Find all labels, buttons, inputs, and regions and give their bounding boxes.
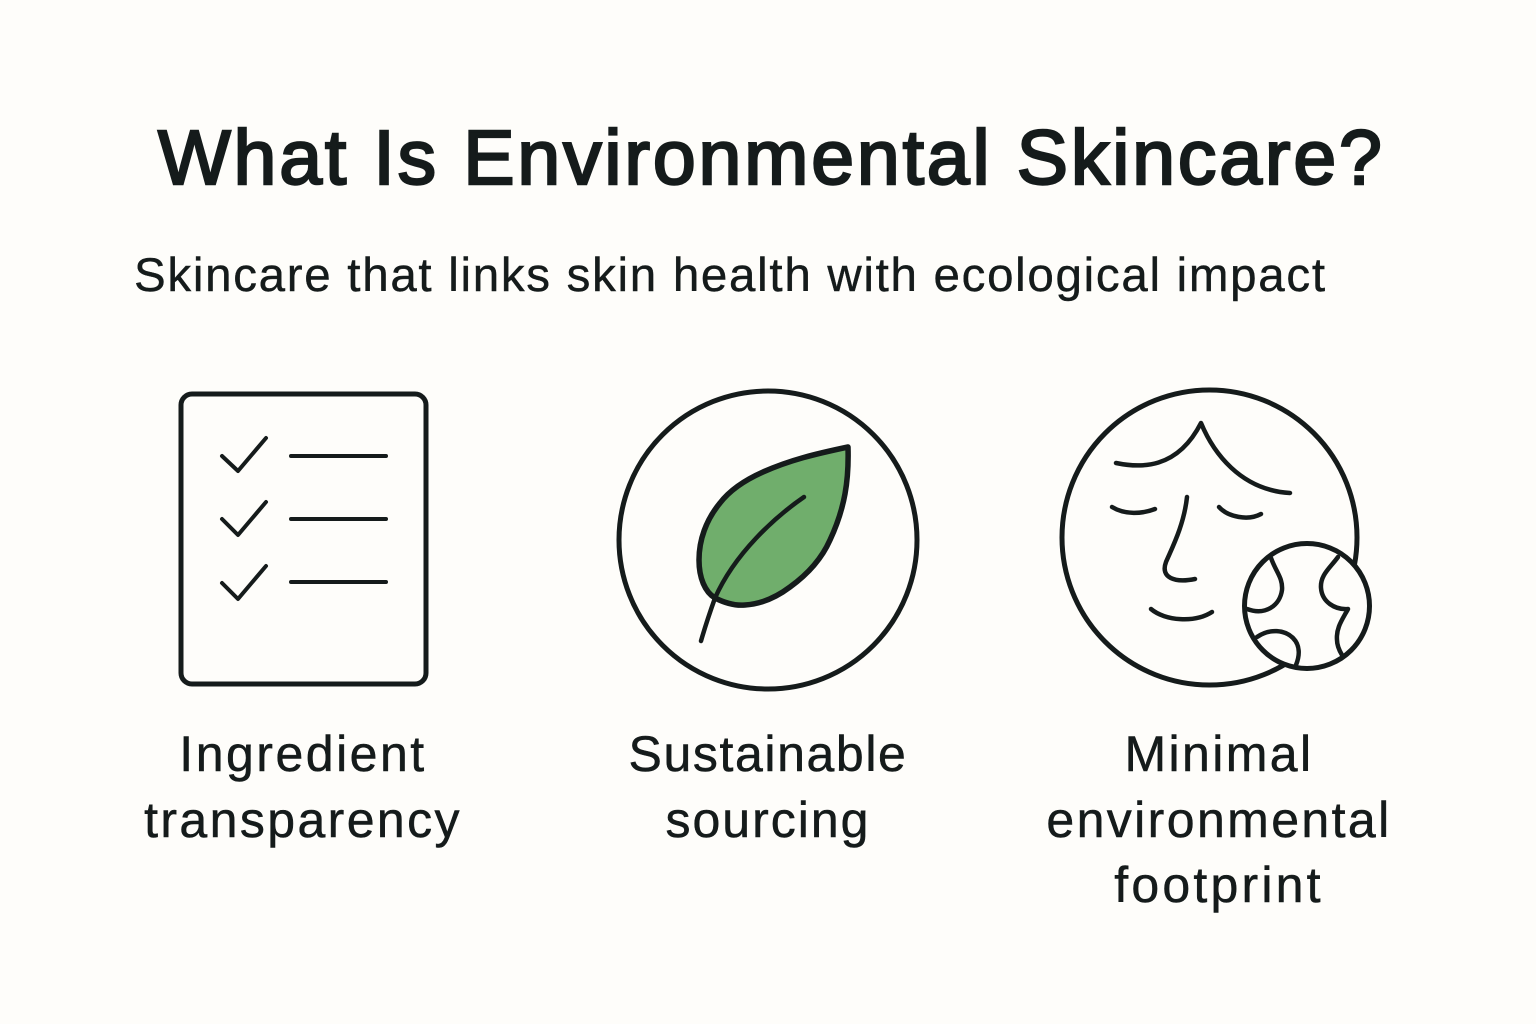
icon: leaf in circle	[619, 391, 917, 689]
label: ingredient transparency: Ingredient	[179, 726, 427, 782]
icon: checklist	[181, 394, 426, 684]
title: What Is Environmental Skincare?	[158, 115, 1385, 201]
subtitle: Skincare that links skin health with ecological impact	[134, 249, 1327, 302]
icon: face with globe	[1062, 390, 1370, 685]
label: ingredient transparency	[144, 726, 462, 848]
label: minimal environmental footprint: Minimal	[1124, 726, 1314, 782]
label: sustainable sourcing: Sustainable	[629, 726, 907, 782]
label: minimal environmental footprint: environmental	[1046, 792, 1392, 848]
label: minimal environmental footprint	[1046, 726, 1392, 913]
label: sustainable sourcing: sourcing	[666, 792, 870, 848]
label: sustainable sourcing	[629, 726, 907, 848]
label: ingredient transparency: transparency	[144, 792, 462, 848]
label: minimal environmental footprint: footprint	[1114, 857, 1324, 913]
